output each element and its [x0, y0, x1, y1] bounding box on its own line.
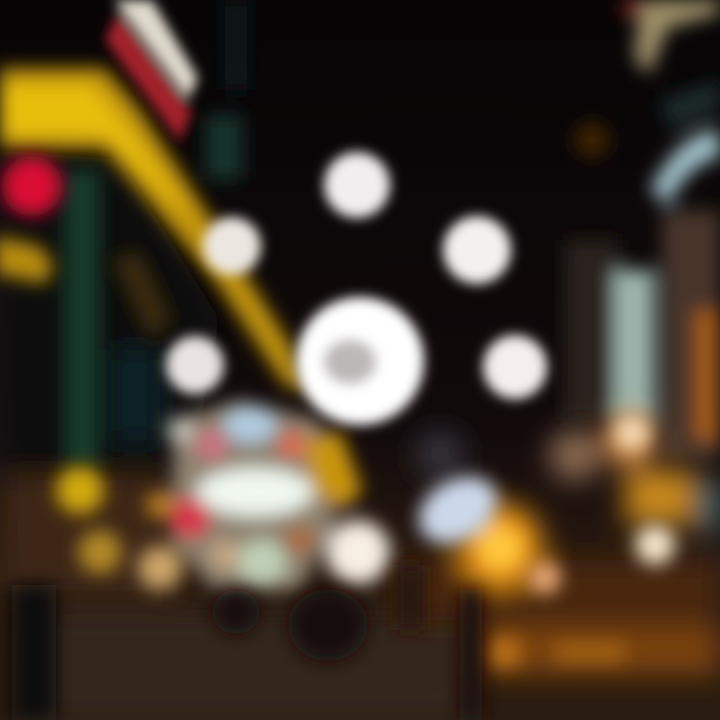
circle: right	[483, 335, 547, 399]
sign: red light	[2, 156, 62, 216]
street figures and cars	[12, 565, 482, 720]
circle: left lower	[166, 336, 224, 394]
sign: olive panel	[112, 252, 172, 340]
circle: top centre	[324, 152, 390, 218]
right buildings	[565, 0, 720, 460]
flag: red and white banner	[105, 0, 198, 142]
street lights: lower right	[400, 414, 720, 675]
circle: upper right	[443, 216, 511, 284]
circle: central hub	[296, 297, 424, 425]
building: green column	[64, 0, 247, 465]
sign: small yellow bar	[0, 236, 54, 284]
icon: hub centre	[324, 340, 376, 384]
sign: yellow diagonal band	[0, 68, 308, 392]
building: left facade	[0, 150, 470, 720]
street lights: bright spots	[407, 414, 675, 666]
circle: left upper	[203, 217, 261, 275]
shop windows: colourful storefront	[56, 400, 390, 590]
